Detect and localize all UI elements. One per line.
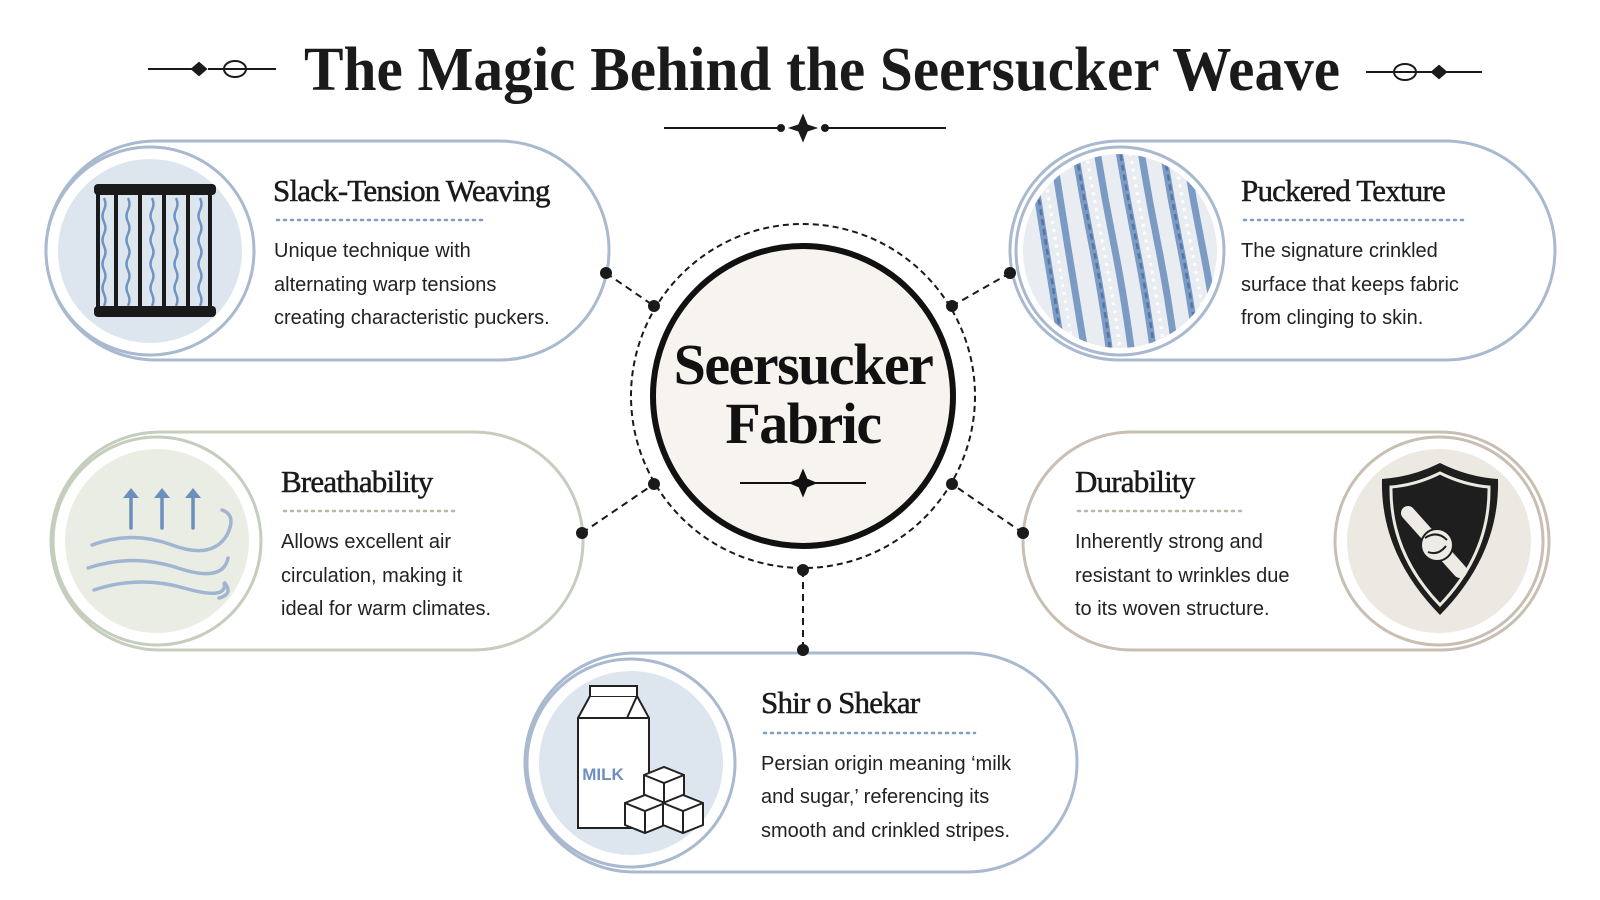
panel: puckered texture: surface that keeps fabric	[1241, 274, 1459, 296]
title: The Magic Behind the Seersucker Weave	[304, 36, 1340, 104]
center hub: Fabric	[725, 391, 881, 456]
ornament: right	[1366, 64, 1482, 80]
panel: shir o shekar: and sugar,’ referencing its	[761, 786, 989, 808]
panel: puckered texture: Puckered Texture	[1241, 173, 1445, 208]
panel: breathability	[51, 432, 583, 650]
panel: breathability: circulation, making it	[281, 565, 463, 587]
panel: breathability: Allows excellent air	[281, 531, 451, 553]
panel: puckered texture: from clinging to skin.	[1241, 307, 1423, 329]
panel: shir o shekar: Shir o Shekar	[761, 685, 921, 720]
panel: durability: Inherently strong and	[1075, 531, 1263, 553]
connectors	[576, 267, 1029, 656]
panel: shir o shekar	[525, 653, 1077, 872]
icon: loom	[94, 184, 216, 317]
icon: milk and sugar: MILK	[582, 765, 624, 784]
center hub: Seersucker	[674, 332, 933, 397]
panel: shir o shekar: Persian origin meaning ‘milk	[761, 753, 1012, 775]
panel: breathability: ideal for warm climates.	[281, 598, 491, 620]
panel: durability	[1023, 432, 1549, 650]
panel: slack-tension weaving: Unique technique with	[274, 240, 471, 262]
panel: slack-tension weaving	[46, 141, 609, 360]
divider under title	[664, 116, 946, 140]
icon: milk and sugar	[578, 686, 703, 833]
panel: slack-tension weaving: creating characteristic puckers.	[274, 307, 550, 329]
center hub	[631, 224, 975, 568]
panel: slack-tension weaving: alternating warp tensions	[274, 274, 496, 296]
ornament: left	[148, 61, 276, 77]
panel: puckered texture: The signature crinkled	[1241, 240, 1438, 262]
panel: puckered texture	[1010, 141, 1555, 360]
icon: fabric texture	[1023, 154, 1217, 348]
panel: breathability: Breathability	[281, 464, 434, 499]
panel: durability: resistant to wrinkles due	[1075, 565, 1290, 587]
icon: shield with knot	[1382, 463, 1498, 615]
panel: durability: to its woven structure.	[1075, 598, 1270, 620]
panel: durability: Durability	[1075, 464, 1196, 499]
panel: shir o shekar: smooth and crinkled stripes.	[761, 820, 1010, 842]
icon: air flow	[88, 488, 231, 598]
panel: slack-tension weaving: Slack-Tension Weaving	[273, 173, 550, 208]
